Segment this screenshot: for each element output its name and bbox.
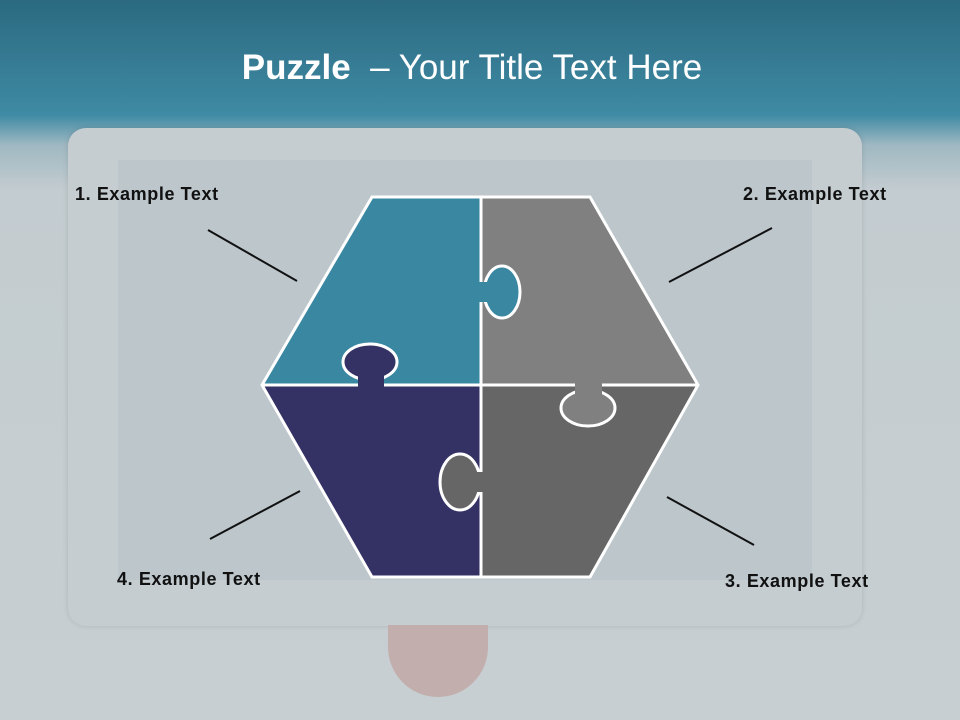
tab teal <box>478 266 520 318</box>
tablet screen <box>118 160 812 580</box>
tab navy <box>343 344 397 387</box>
label 3: 3. Example Text <box>725 571 869 591</box>
tab dark <box>440 454 483 510</box>
finger <box>388 625 488 697</box>
label 2: 2. Example Text <box>743 184 887 204</box>
title: Puzzle – Your Title Text Here <box>242 48 702 87</box>
label 4: 4. Example Text <box>117 569 261 589</box>
label 1: 1. Example Text <box>75 184 219 204</box>
tab gray <box>561 383 615 426</box>
background tablet <box>68 128 862 626</box>
leader lines <box>208 228 772 545</box>
